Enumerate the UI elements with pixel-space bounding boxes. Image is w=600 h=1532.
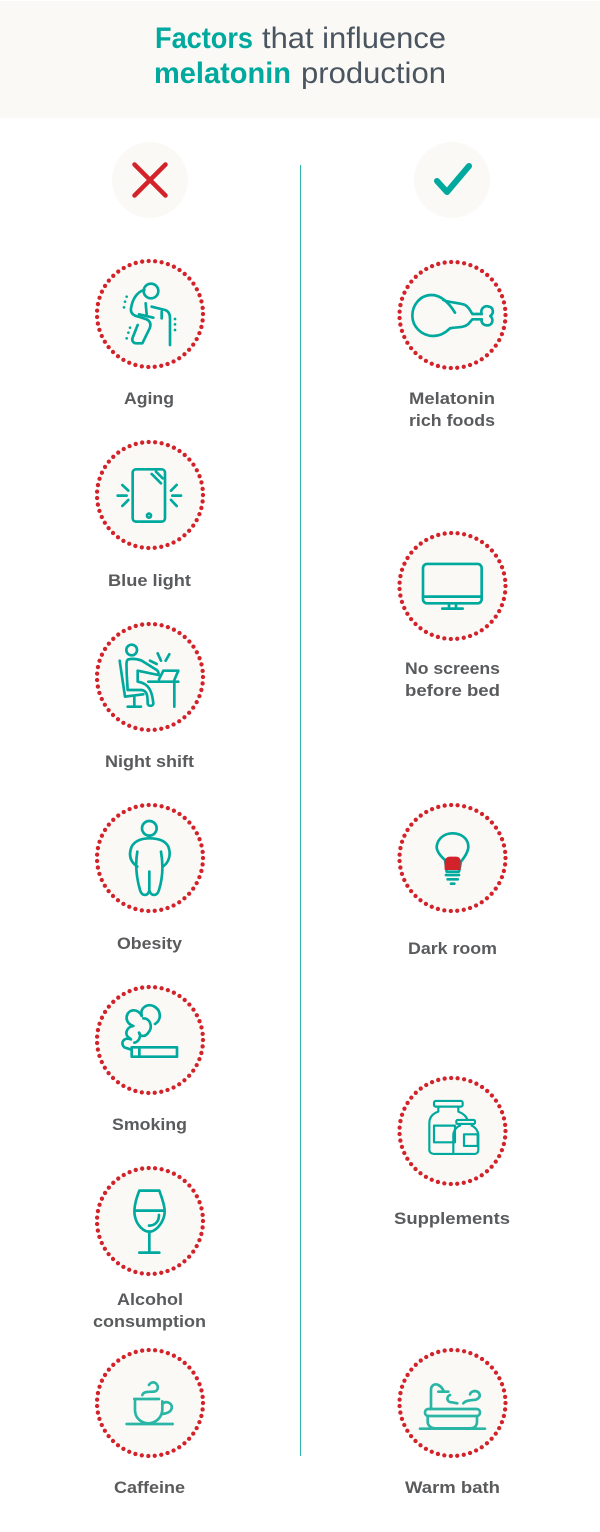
icon: person working at laptop <box>120 645 178 707</box>
icon: chicken drumstick <box>412 295 493 336</box>
item: Aging <box>97 261 203 408</box>
label: Alcohol <box>117 1290 183 1309</box>
title: production <box>301 57 446 90</box>
label: Night shift <box>105 752 194 771</box>
label: Dark room <box>408 939 497 958</box>
item: Warm bath <box>400 1350 506 1497</box>
icon: steaming cup <box>127 1382 173 1424</box>
label <box>405 659 500 700</box>
item: Smoking <box>97 987 203 1134</box>
center divider line <box>300 165 301 1456</box>
icon: bathtub with steam <box>420 1384 485 1429</box>
label: Smoking <box>112 1115 187 1134</box>
label: Blue light <box>108 571 191 590</box>
label <box>409 389 495 430</box>
label: rich foods <box>409 411 495 430</box>
item: Supplements <box>394 1078 510 1228</box>
item: Melatonin rich foods <box>400 262 506 430</box>
icon: cigarette with smoke <box>122 1005 177 1057</box>
label: Obesity <box>117 934 183 953</box>
label: Aging <box>124 389 174 408</box>
label: Melatonin <box>409 389 495 408</box>
label: Supplements <box>394 1209 510 1228</box>
icon: red cross badge <box>112 142 188 218</box>
label: consumption <box>93 1312 206 1331</box>
item: Alcohol consumption <box>93 1168 206 1331</box>
icon: teal check badge <box>414 142 490 218</box>
icon: computer monitor <box>423 564 482 609</box>
item: Caffeine <box>97 1350 203 1497</box>
icon: overweight person <box>130 821 170 895</box>
label: No screens <box>405 659 500 678</box>
label: before bed <box>405 681 500 700</box>
item: Obesity <box>97 805 203 953</box>
item: Dark room <box>400 805 506 958</box>
title: that influence <box>262 22 446 55</box>
header band <box>0 1 600 118</box>
icon: light bulb <box>437 833 468 884</box>
label: Warm bath <box>405 1478 500 1497</box>
label <box>93 1290 206 1331</box>
title: Factors <box>155 22 253 55</box>
title <box>154 22 446 90</box>
title: melatonin <box>154 57 291 90</box>
item: Night shift <box>97 624 203 771</box>
item: Blue light <box>97 442 203 590</box>
item: No screens before bed <box>400 533 506 700</box>
icon: supplement jars <box>429 1101 478 1154</box>
icon: wine glass <box>134 1191 165 1253</box>
icon: phone with light rays <box>118 469 181 522</box>
label: Caffeine <box>114 1478 185 1497</box>
icon: elderly person with cane <box>124 284 175 345</box>
